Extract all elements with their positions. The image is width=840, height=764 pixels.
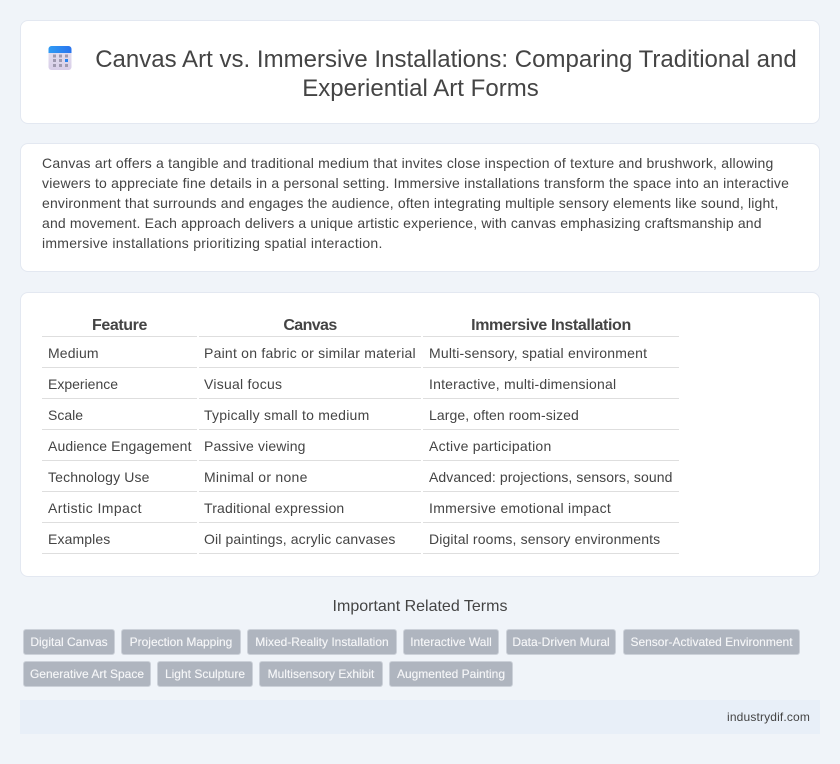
comparison table: Audience Engagement (48, 438, 192, 454)
comparison table: Advanced: projections, sensors, sound (429, 469, 672, 485)
comparison table: Active participation (429, 438, 552, 454)
comparison table: Passive viewing (204, 438, 306, 454)
panel: intro paragraph (20, 143, 820, 272)
title: Canvas Art vs. Immersive Installations: Comparing Traditional and (95, 46, 797, 73)
related term tags: Light Sculpture (165, 667, 245, 681)
heading: important related terms: Important Related Terms (333, 598, 507, 615)
comparison table: Technology Use (48, 469, 150, 485)
icon: calendar (48, 46, 72, 70)
related term tags: Generative Art Space (30, 667, 144, 681)
intro text: environment that surrounds and engages the audience, often integrating multiple sensory elements like sound, light, (42, 195, 779, 211)
intro text: Canvas art offers a tangible and traditional medium that invites close inspection of texture and brushwork, allowing (42, 155, 774, 171)
comparison table: Experience (48, 376, 118, 392)
related term tags: Digital Canvas (30, 635, 108, 649)
comparison table: Visual focus (204, 376, 282, 392)
comparison table: Traditional expression (204, 500, 344, 516)
related term tags: Augmented Painting (397, 667, 505, 681)
comparison table: Scale (48, 407, 83, 423)
comparison table: Large, often room-sized (429, 407, 579, 423)
related term tags (23, 629, 800, 687)
comparison table: Artistic Impact (48, 500, 142, 516)
comparison table: Immersive Installation (471, 317, 631, 334)
comparison table: Paint on fabric or similar material (204, 345, 416, 361)
related term tags: Multisensory Exhibit (268, 667, 374, 681)
comparison table: Minimal or none (204, 469, 308, 485)
intro text: immersive installations prioritizing spatial interaction. (42, 235, 383, 251)
intro text: and movement. Each approach delivers a unique artistic experience, with canvas emphasizing craftsmanship and (42, 215, 762, 231)
header card (20, 20, 820, 124)
comparison table: Multi-sensory, spatial environment (429, 345, 647, 361)
comparison table: Examples (48, 531, 110, 547)
comparison table: Typically small to medium (204, 407, 370, 423)
related term tags: Data-Driven Mural (512, 635, 610, 649)
comparison table (42, 317, 679, 554)
title: Experiential Art Forms (302, 75, 539, 102)
comparison table: Oil paintings, acrylic canvases (204, 531, 396, 547)
footer source text: industrydif.com (727, 710, 810, 724)
footer bar (20, 700, 820, 734)
related term tags: Interactive Wall (410, 635, 492, 649)
comparison table: Medium (48, 345, 99, 361)
comparison table: Digital rooms, sensory environments (429, 531, 660, 547)
related term tags: Mixed-Reality Installation (255, 635, 389, 649)
title (95, 46, 797, 102)
comparison table: Canvas (283, 317, 337, 334)
comparison table: Feature (92, 317, 147, 334)
comparison table: Interactive, multi-dimensional (429, 376, 616, 392)
intro text: viewers to appreciate fine details in a personal setting. Immersive installations transform the space into an interactive (42, 175, 789, 191)
intro text (42, 155, 789, 251)
related term tags: Projection Mapping (130, 635, 232, 649)
panel: comparison table (20, 292, 820, 577)
related term tags: Sensor-Activated Environment (630, 635, 793, 649)
comparison table: Immersive emotional impact (429, 500, 611, 516)
